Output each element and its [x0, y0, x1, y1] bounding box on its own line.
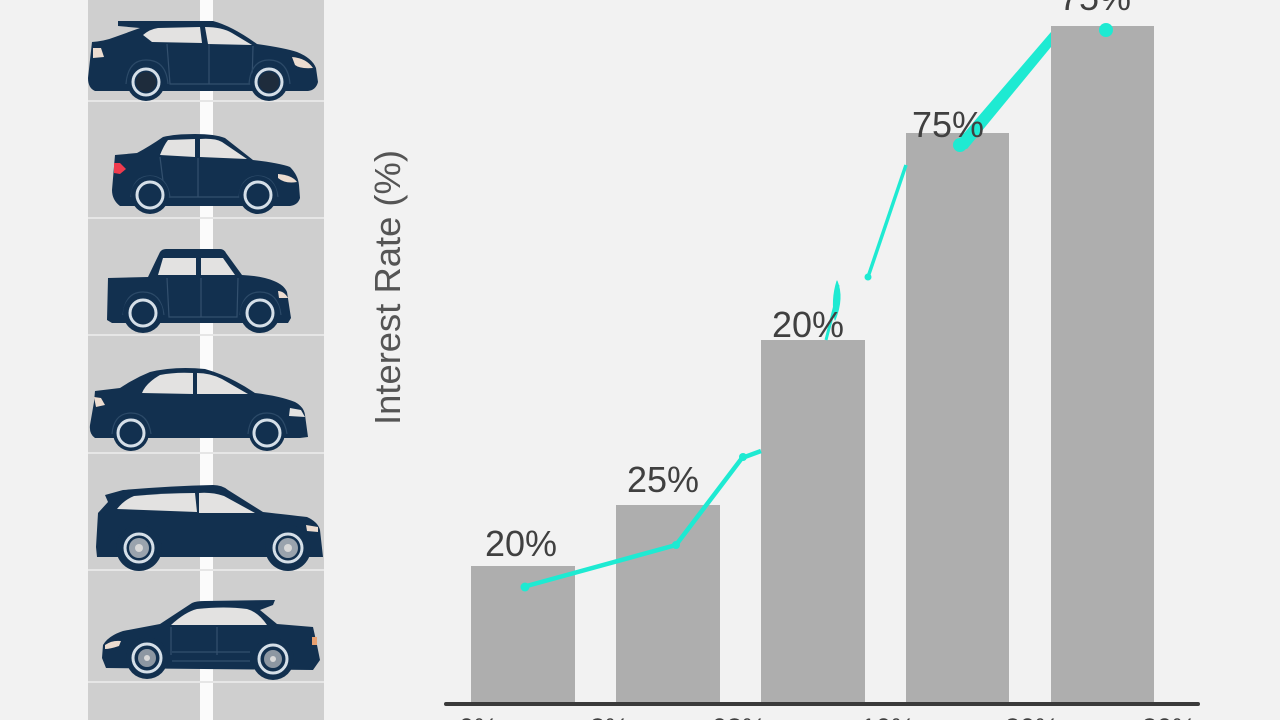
y-axis title: Interest Rate (%)	[367, 150, 408, 425]
icon: car 2 sedan	[112, 134, 300, 214]
bar 5	[1051, 26, 1154, 704]
bar chart	[444, 26, 1200, 706]
label bar 2: 25%	[627, 459, 699, 500]
trend line	[520, 23, 1113, 592]
icon: car 5 wagon	[96, 485, 323, 571]
label bar 1: 20%	[485, 523, 557, 564]
label bar 3: 20%	[772, 304, 844, 345]
label bar 4: 75%	[912, 104, 984, 145]
x axis labels	[459, 713, 1196, 720]
bar 4	[906, 133, 1009, 704]
bar 3	[761, 340, 865, 704]
bar 2	[616, 505, 720, 704]
icon: car 3 pickup	[107, 249, 291, 333]
bar 1	[471, 566, 575, 704]
icon: car 4 sedan	[90, 368, 308, 451]
icon: car 6 coupe	[102, 600, 320, 680]
x axis line	[444, 702, 1200, 706]
panel: car column road	[88, 0, 324, 720]
value labels	[485, 0, 1131, 564]
icon: car 1 fastback	[88, 21, 318, 101]
